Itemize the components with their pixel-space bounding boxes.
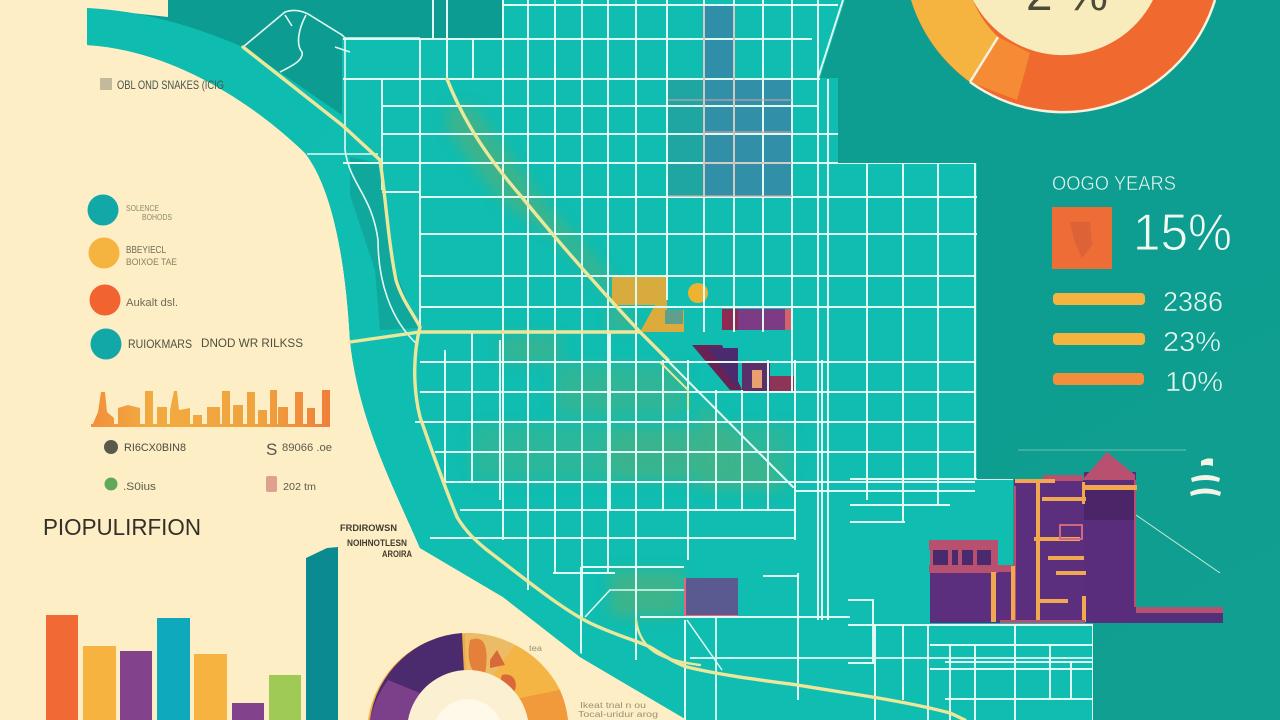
icon: small stacked glyph xyxy=(100,78,112,90)
donut chart: bottom xyxy=(368,633,568,720)
figure label 2: .S0ius xyxy=(123,481,157,493)
legend item 1 xyxy=(88,194,172,226)
map: upper-left street outline xyxy=(243,10,420,345)
icon: dark blob xyxy=(104,440,118,454)
callout text: AROIRA xyxy=(382,549,412,559)
legend item 4: RUIOKMARS xyxy=(128,337,192,351)
big stat value: 15% xyxy=(1133,204,1232,262)
map: purple district blocks xyxy=(684,309,794,617)
map: pink street tint over blue zone xyxy=(668,6,792,196)
icon: pink tag xyxy=(266,476,277,492)
map: street grid xyxy=(343,0,1093,720)
stat value 3: 10% xyxy=(1165,366,1223,397)
stat bar 3 xyxy=(1053,373,1144,385)
small caption near donut xyxy=(529,644,658,719)
building illustration xyxy=(929,450,1223,623)
stat panel: right side xyxy=(1052,173,1232,397)
legend item 2 xyxy=(88,238,177,268)
stat heading: OOGO YEARS xyxy=(1052,173,1176,195)
small caption near donut: Tocal-uridur arog xyxy=(578,710,658,719)
map: blue density zone xyxy=(668,6,792,196)
stat value 2: 23% xyxy=(1163,326,1221,357)
legend item 1: SOLENCE xyxy=(126,204,159,213)
stat value 1: 2386 xyxy=(1163,286,1223,317)
legend item 1: BOHODS xyxy=(142,213,172,222)
small caption near donut: Ikeat tnal n ou xyxy=(580,701,646,710)
panel: cream left area xyxy=(0,0,687,720)
icon: white stacked arcs xyxy=(1190,458,1221,496)
legend item 2: BBEYIECL xyxy=(126,245,166,256)
icon: green leaf xyxy=(104,478,118,490)
stat bar 2 xyxy=(1053,333,1145,345)
figure label 1: RI6CX0BIN8 xyxy=(124,442,186,454)
small caption near donut: tea xyxy=(529,644,543,653)
map: yellow central blocks xyxy=(612,277,708,332)
legend item 4: DNOD WR RILKSS xyxy=(201,336,303,350)
panel heading: small title: OBL OND SNAKES (ICIG xyxy=(117,78,224,92)
map: light teal city area xyxy=(305,0,1093,720)
legend item 4 xyxy=(90,328,303,360)
panel heading: small title xyxy=(100,78,224,92)
figure value 2: 202 tm xyxy=(283,482,316,493)
river band xyxy=(87,8,687,720)
map: yellow highways xyxy=(243,47,965,720)
heading: population: PIOPULIRFION xyxy=(43,514,201,540)
skyline bar chart xyxy=(91,390,330,427)
map: river channel shading xyxy=(350,157,418,330)
legend item 3 xyxy=(90,284,178,316)
figure value 1: 89066 .oe xyxy=(282,442,332,454)
map: upper-right diagonal edge xyxy=(818,0,843,78)
map: soft green density zones xyxy=(447,106,792,617)
stat icon: orange square xyxy=(1052,207,1112,269)
stat bar 1 xyxy=(1053,293,1145,305)
legend item 2: BOIXOE TAE xyxy=(126,257,177,267)
callout text xyxy=(340,523,412,559)
callout text: NOIHNOTLESN xyxy=(347,538,407,548)
legend xyxy=(88,194,303,360)
bar chart: population xyxy=(46,547,338,720)
icon: dollar glyph: S xyxy=(266,440,277,459)
donut chart: top right xyxy=(911,0,1215,112)
callout text: FRDIROWSN xyxy=(340,523,397,533)
key figures row xyxy=(104,440,332,493)
legend item 3: Aukalt dsl. xyxy=(126,297,178,309)
